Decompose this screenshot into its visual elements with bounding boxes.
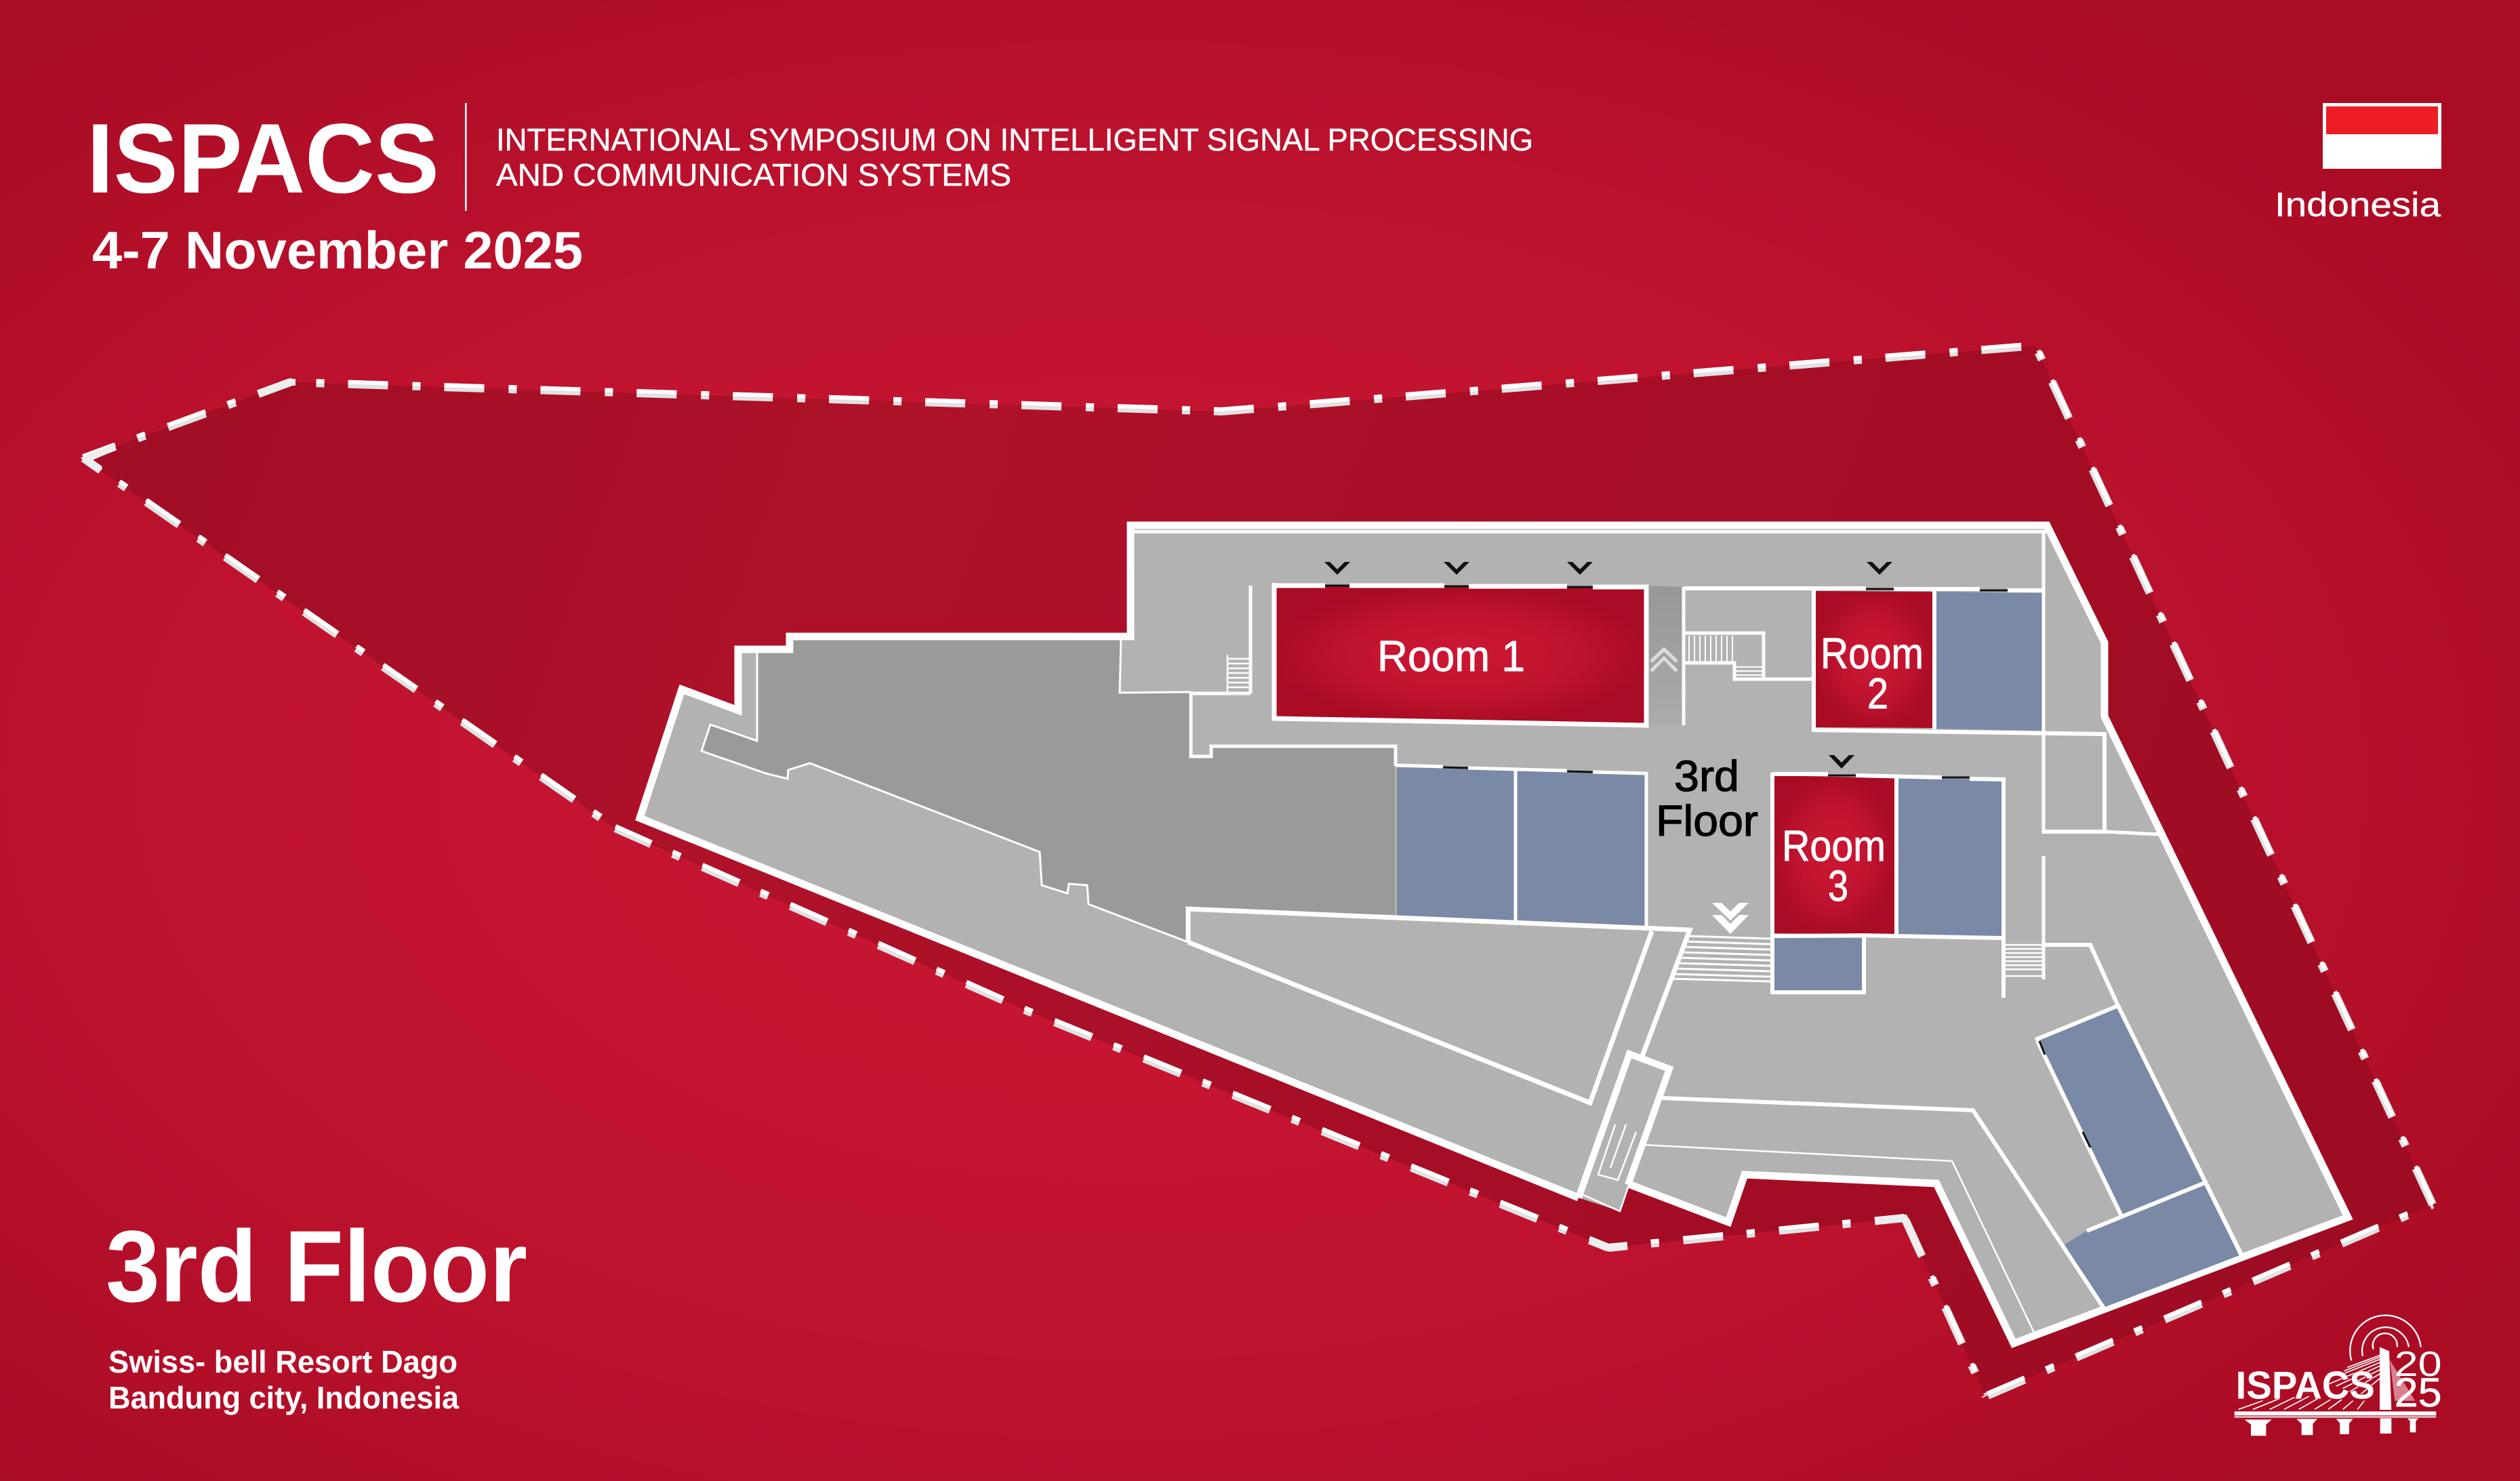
inner top wall <box>1131 530 2054 533</box>
bridge piers <box>2245 1418 2418 1436</box>
header logo text: ISPACS <box>87 103 439 214</box>
floor plan <box>640 525 2348 1343</box>
tower <box>2380 1347 2391 1410</box>
blue room angled upper <box>2039 1008 2203 1215</box>
floor title: 3rd Floor <box>106 1209 527 1323</box>
symposium title: AND COMMUNICATION SYSTEMS <box>496 157 1011 192</box>
venue <box>108 1344 459 1415</box>
door chevrons <box>1324 562 1892 769</box>
grand stair <box>1671 936 1772 981</box>
right angled wall <box>2035 945 2241 1255</box>
room 2 <box>1815 591 1933 728</box>
down chevrons <box>1712 903 1749 934</box>
site boundary area <box>83 346 2433 1396</box>
building footprint <box>640 525 2348 1343</box>
room 1 <box>1274 583 1646 725</box>
room 3: Room <box>1782 821 1886 870</box>
header divider <box>465 103 466 211</box>
long corridor walls <box>1663 1098 2104 1308</box>
vertical corridor walls <box>1190 533 2160 979</box>
angled room walls <box>2037 1006 2241 1255</box>
flag <box>2323 103 2441 169</box>
upper cables <box>2330 1355 2380 1394</box>
logo year <box>2395 1345 2442 1415</box>
stair right of room 3 <box>2004 945 2044 976</box>
floor label: 3rd <box>1674 752 1739 800</box>
walls around room 3 <box>1772 773 2004 998</box>
corridor strip <box>1646 586 1683 725</box>
connector bridge <box>1579 1052 1671 1211</box>
void area border <box>702 652 1188 942</box>
hatch triangle <box>2390 1360 2415 1401</box>
country name: Indonesia <box>2275 186 2441 224</box>
floor label <box>1656 752 1758 845</box>
room 3 <box>1774 775 1895 935</box>
outer wall <box>640 525 2348 1343</box>
room 2: 2 <box>1867 669 1888 718</box>
ISPACS 2025 logo <box>2235 1316 2442 1436</box>
floor label: Floor <box>1656 796 1758 845</box>
blue room right of room 2 <box>1935 592 2042 731</box>
void area <box>702 640 1395 942</box>
venue: Bandung city, Indonesia <box>108 1380 459 1415</box>
blue rooms lower row <box>1396 765 1646 930</box>
lower diagonal walls <box>1188 909 1690 1103</box>
door marks room 3 <box>1828 775 1970 777</box>
deck cables <box>2239 1396 2364 1409</box>
door marks room 2 <box>1866 589 2008 590</box>
bridge deck <box>2235 1411 2436 1417</box>
up chevrons <box>1651 649 1677 671</box>
walls around room 2 <box>1684 588 2105 832</box>
service room outline <box>1120 637 1190 693</box>
room 2: Room <box>1821 629 1924 678</box>
symposium title <box>496 122 1533 192</box>
logo year: 20 <box>2395 1345 2442 1384</box>
date: 4-7 November 2025 <box>92 220 583 280</box>
blue room right of room 3 <box>1898 778 2002 937</box>
venue: Swiss- bell Resort Dago <box>108 1344 458 1379</box>
stair left of room 1 <box>1227 655 1251 693</box>
blue room below room 3 <box>1774 938 1864 990</box>
signal arcs <box>2350 1316 2421 1360</box>
door marks angled room <box>2039 1041 2090 1148</box>
blue room angled lower <box>2065 1183 2241 1307</box>
logo year: 25 <box>2395 1369 2442 1415</box>
symposium title: INTERNATIONAL SYMPOSIUM ON INTELLIGENT SIGNAL PROCESSING <box>496 122 1533 157</box>
logo wordmark: ISPACS <box>2236 1364 2375 1407</box>
room 1: Room 1 <box>1377 632 1525 681</box>
dash-dot site boundary <box>83 344 2433 1396</box>
room 3: 3 <box>1828 861 1848 910</box>
stair box near room 2 <box>1685 633 1814 679</box>
